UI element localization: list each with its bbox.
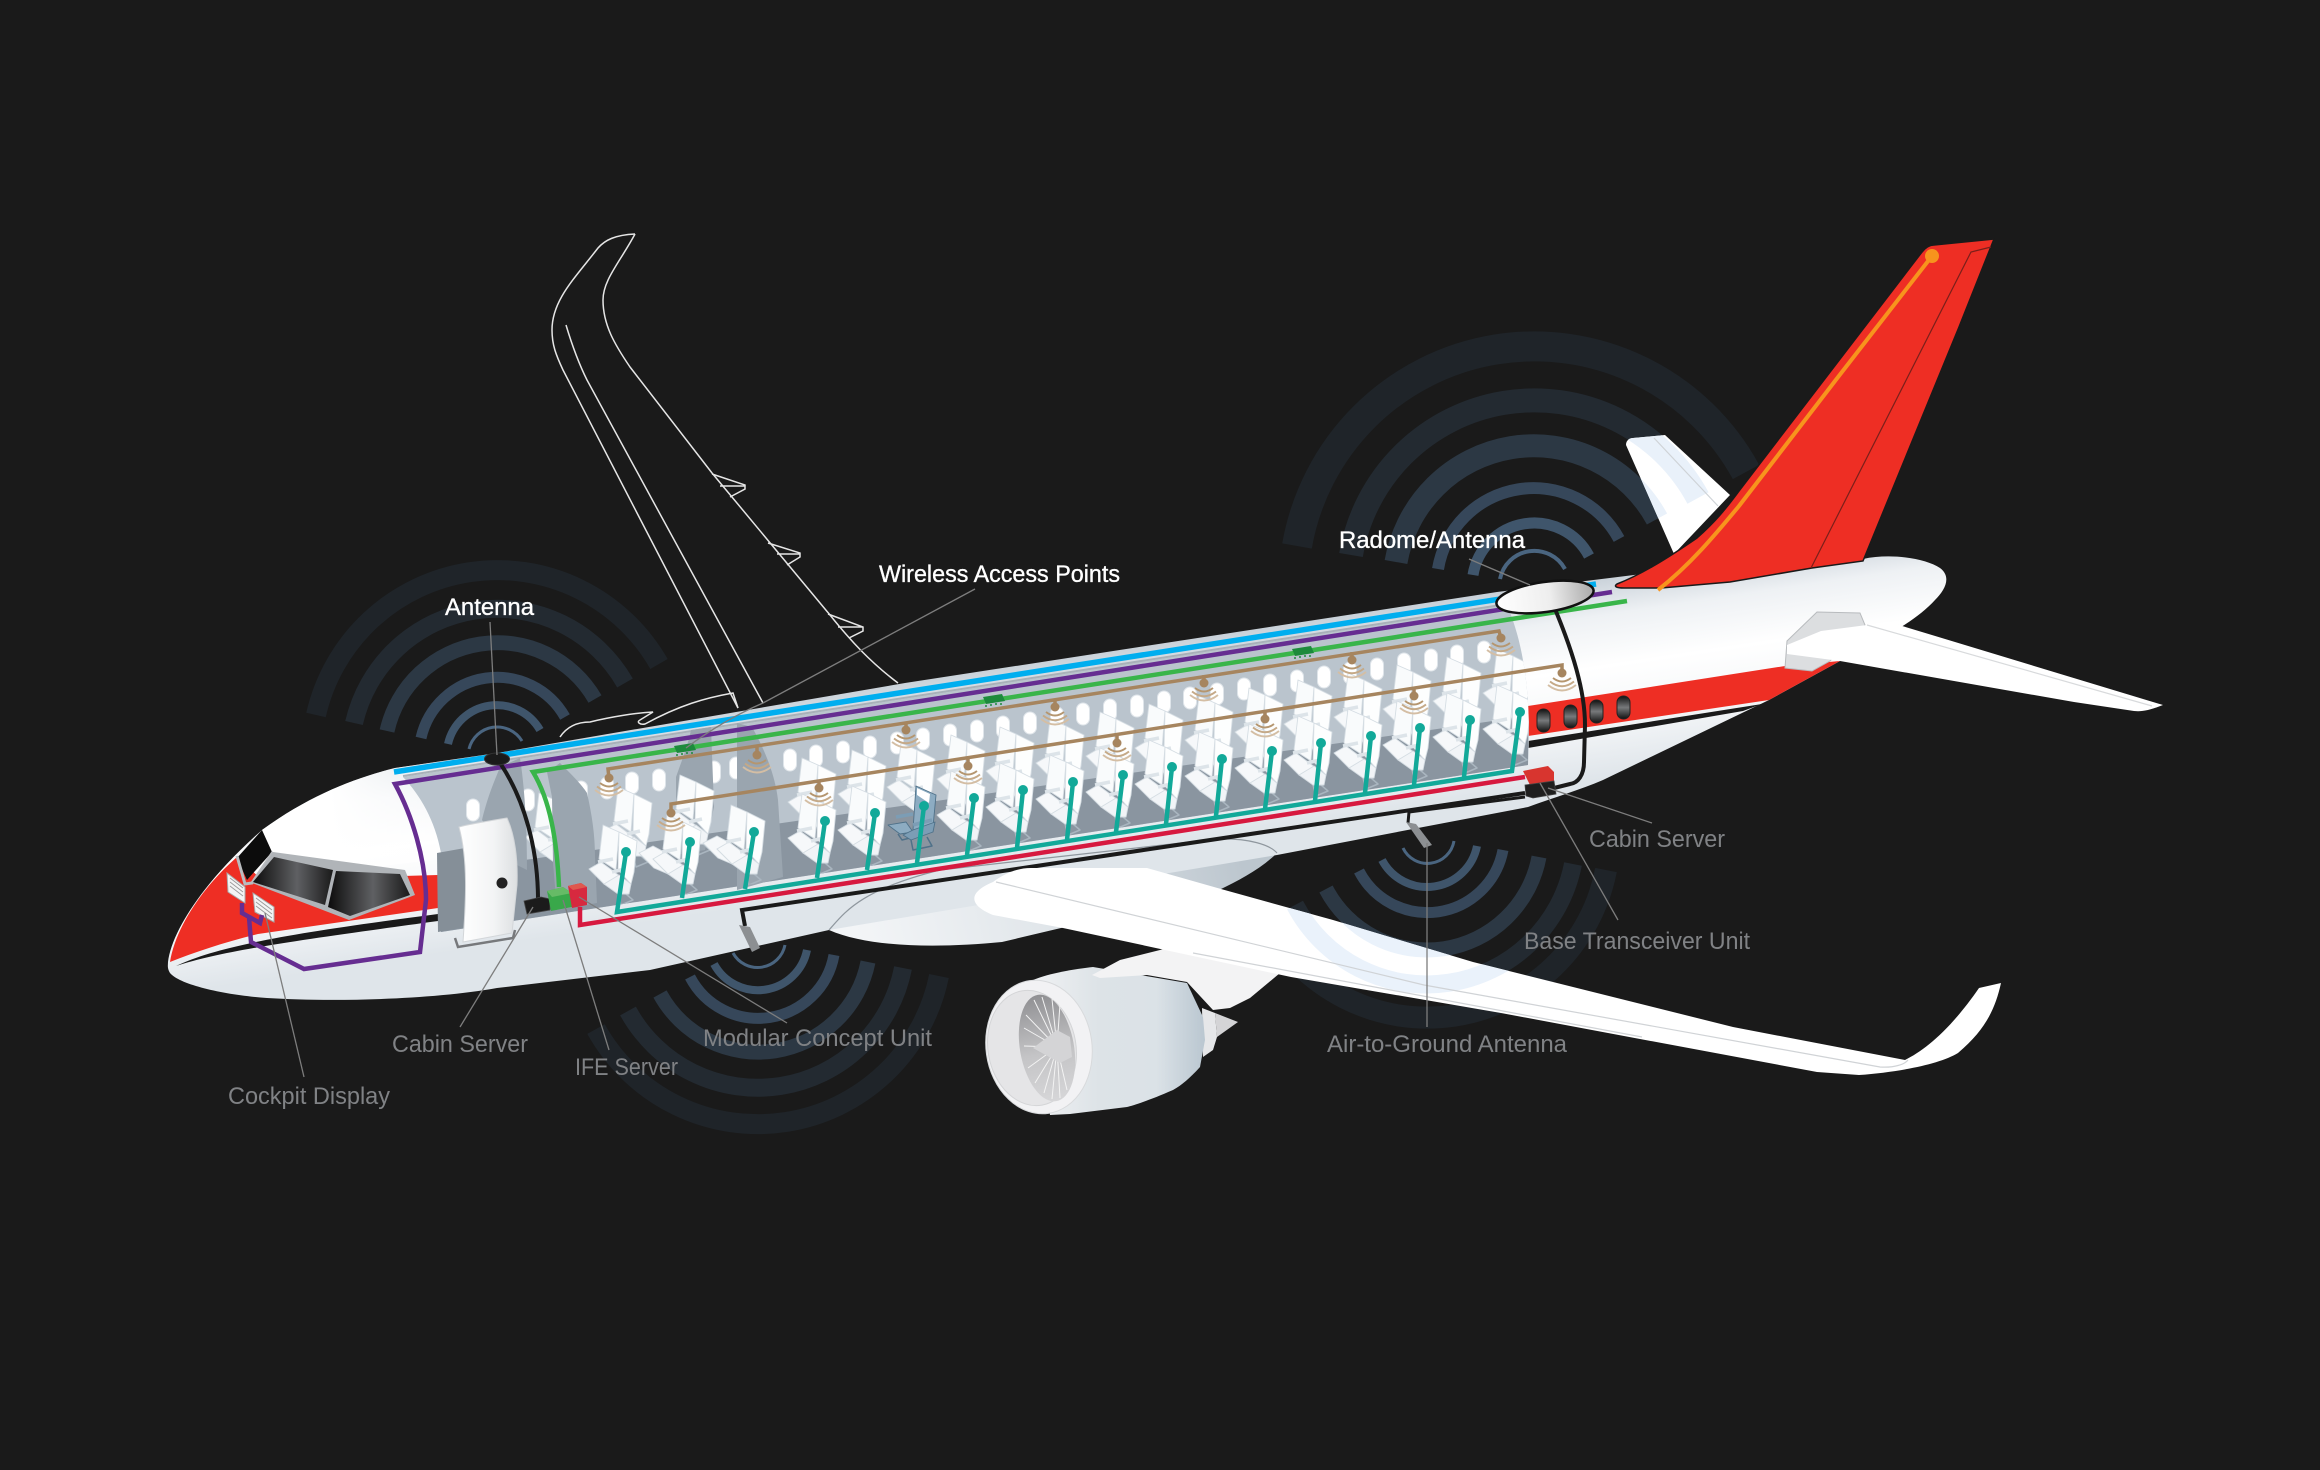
far horizontal stabilizer	[1626, 435, 1730, 553]
radome	[1494, 575, 1596, 619]
rear black ring	[1550, 609, 1585, 789]
label: Wireless Access Points: Wireless Access Points	[879, 561, 1120, 588]
belly fairing	[829, 839, 1277, 946]
radio waves: radome antenna	[1297, 346, 1746, 579]
front black ring	[500, 763, 538, 900]
radio waves: lower front antenna	[596, 945, 939, 1124]
cabin floor	[441, 716, 1528, 932]
far wing outline	[552, 234, 898, 737]
green cable	[533, 601, 1627, 887]
near stabilizer fairing	[1785, 612, 1865, 671]
label: Cockpit Display: Cockpit Display	[228, 1083, 390, 1110]
brown lower cable	[671, 665, 1562, 813]
nacelle	[1033, 967, 1205, 1115]
highlighted seat	[888, 786, 936, 850]
purple cable	[242, 592, 1612, 969]
red cable	[580, 777, 1525, 925]
leader lines	[265, 559, 1652, 1077]
cabin bulkheads	[437, 723, 783, 932]
cabin top trim line	[403, 604, 1507, 776]
spinner	[1033, 1030, 1072, 1063]
belly fairing line	[829, 839, 1277, 930]
fan blades	[1024, 997, 1067, 1099]
tail livery stripe	[1528, 661, 1840, 748]
cockpit displays	[227, 873, 274, 922]
cabin wall	[403, 605, 1529, 932]
nose highlight	[262, 753, 520, 880]
passenger seats: front row	[589, 685, 1531, 905]
lower antenna stubs	[739, 822, 1432, 952]
engine exhaust	[1202, 1008, 1217, 1057]
near horizontal stabilizer	[1787, 622, 2163, 711]
rear fuselage windows	[1537, 696, 1630, 732]
teal cable	[617, 712, 1520, 912]
label: Air-to-Ground Antenna: Air-to-Ground Antenna	[1327, 1031, 1568, 1058]
wireless access point icons	[595, 634, 1576, 830]
passenger seats: rear row	[604, 649, 1531, 867]
rear equipment boxes	[1523, 766, 1556, 798]
label: Cabin Server front: Cabin Server	[392, 1031, 528, 1058]
front equipment boxes	[524, 883, 587, 914]
cockpit windows	[237, 830, 415, 920]
green chips	[674, 646, 1314, 756]
radio waves: air-to-ground antenna	[1266, 841, 1606, 1018]
cabin door	[455, 818, 517, 947]
label: Base Transceiver Unit: Base Transceiver Unit	[1524, 928, 1750, 955]
nose livery stripe	[170, 857, 438, 966]
tail fin	[1615, 239, 1994, 590]
near wing	[974, 857, 2001, 1075]
label: Radome/Antenna: Radome/Antenna	[1339, 527, 1526, 554]
teal seat dots	[621, 707, 1525, 857]
top antenna dome	[484, 753, 510, 765]
label: IFE Server: IFE Server	[575, 1054, 678, 1081]
label: Cabin Server rear: Cabin Server	[1589, 826, 1725, 853]
partly hidden forward seat	[525, 793, 573, 873]
fuselage	[168, 556, 1946, 1000]
label: Modular Concept Unit: Modular Concept Unit	[703, 1025, 932, 1052]
engine	[977, 945, 1280, 1121]
second air-to-ground wire	[1408, 797, 1525, 823]
radio waves: top antenna	[316, 570, 659, 749]
brown upper cable	[608, 631, 1501, 778]
cabin windows	[466, 641, 1490, 821]
label: Antenna: Antenna	[445, 594, 535, 621]
pylon	[1092, 945, 1280, 1010]
network cables	[242, 584, 1627, 969]
black air-to-ground cable	[742, 793, 1525, 926]
blue cable	[394, 584, 1596, 772]
